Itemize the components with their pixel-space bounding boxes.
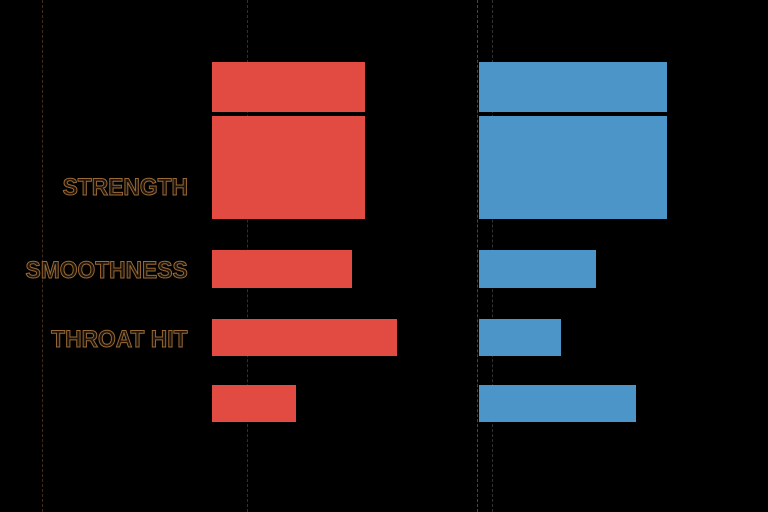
blue bar: throat hit	[479, 319, 561, 356]
red bar: header	[212, 62, 365, 112]
label: smoothness: SMOOTHNESS	[26, 257, 188, 284]
blue bar: fourth	[479, 385, 636, 422]
blue bar: strength	[479, 116, 667, 219]
label: throat hit: THROAT HIT	[52, 326, 188, 353]
red bar: throat hit	[212, 319, 397, 356]
blue bar: header	[479, 62, 667, 112]
red bar: smoothness	[212, 250, 352, 288]
red bar: fourth	[212, 385, 296, 422]
blue bar: smoothness	[479, 250, 596, 288]
red bar: strength	[212, 116, 365, 219]
label: strength: STRENGTH	[63, 174, 188, 201]
